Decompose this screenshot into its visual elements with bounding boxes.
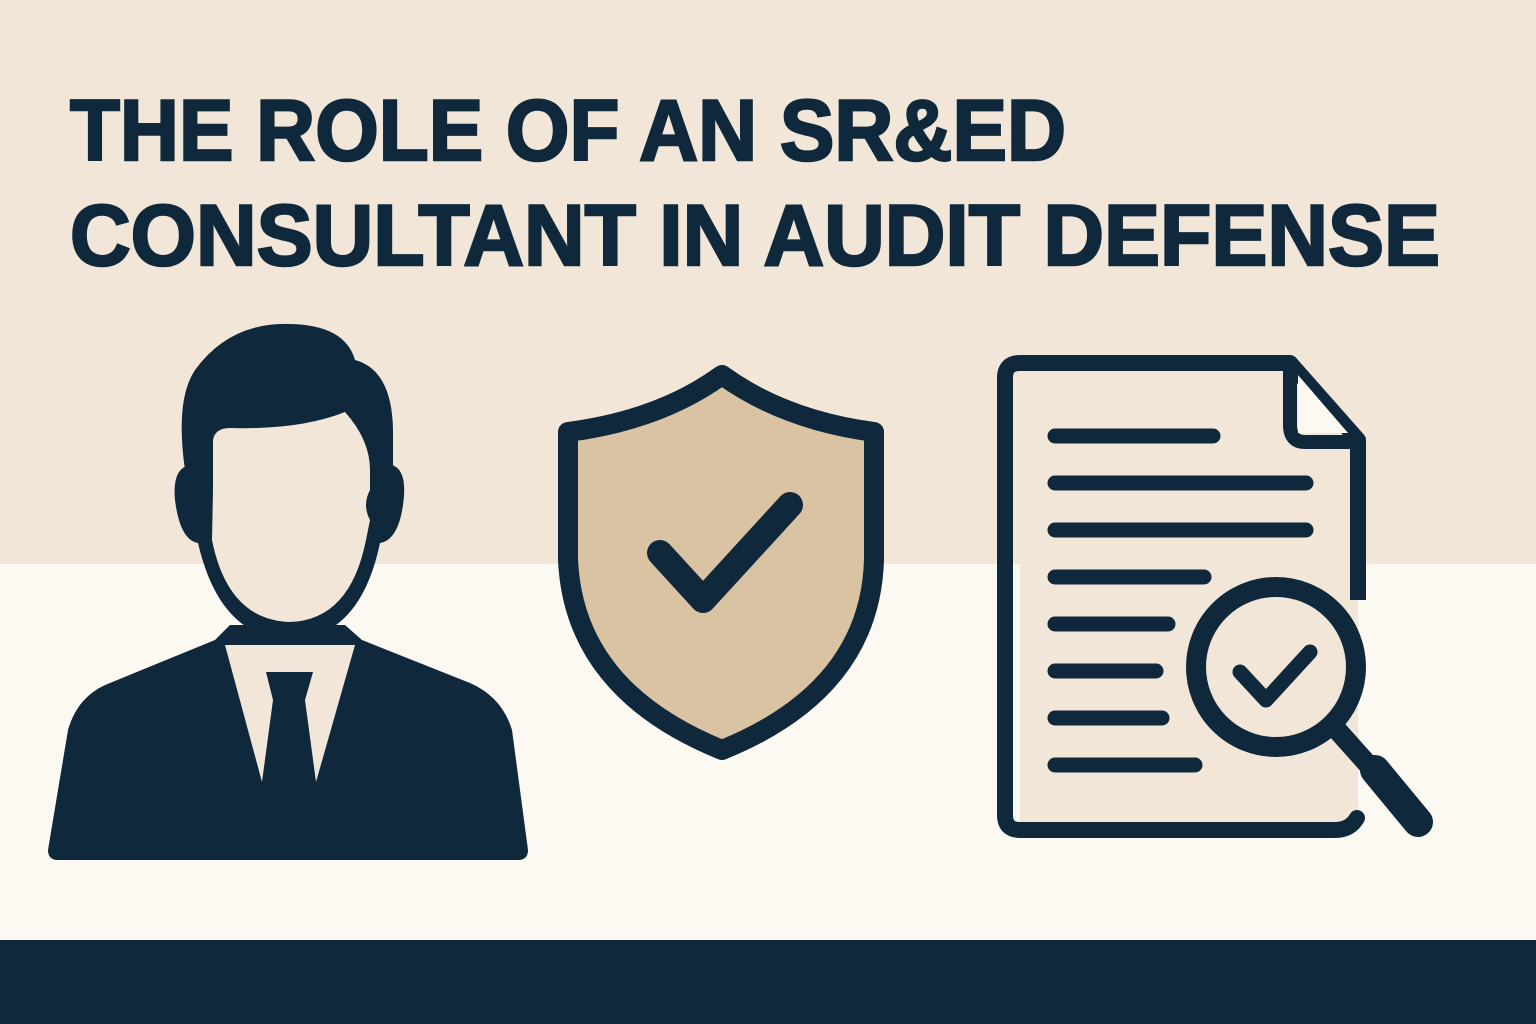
icon: document with magnifier — [1005, 363, 1418, 830]
icon: consultant person — [48, 324, 528, 860]
title: CONSULTANT IN AUDIT DEFENSE — [70, 188, 1440, 284]
title — [70, 83, 1440, 284]
title: THE ROLE OF AN SR&ED — [70, 83, 1066, 179]
footer bar — [0, 940, 1536, 1024]
icon: shield with checkmark — [568, 375, 874, 750]
